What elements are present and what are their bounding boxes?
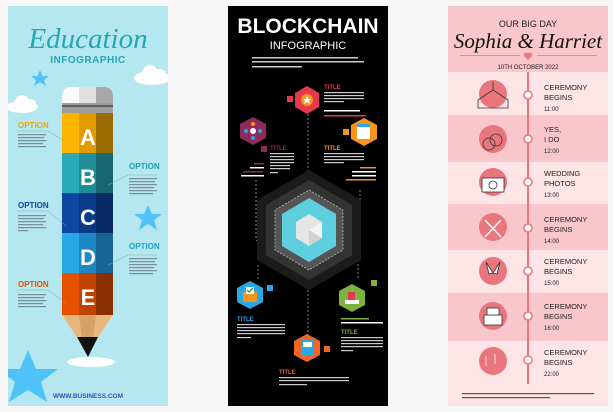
options: OPTION — [18, 121, 49, 130]
timeline entries: CEREMONY — [544, 257, 587, 266]
pencil: E — [81, 285, 95, 310]
timeline entries: BEGINS — [544, 225, 572, 234]
timeline entries: BEGINS — [544, 93, 572, 102]
title block: bottom-right: TITLE — [341, 330, 358, 336]
footer url: WWW.BUSINESS.COM — [53, 393, 123, 400]
timeline entries: 22:00 — [544, 372, 560, 378]
panel: wedding — [448, 6, 608, 406]
timeline entries: BEGINS — [544, 358, 572, 367]
timeline entries: 13:00 — [544, 193, 560, 199]
central hexagon — [257, 170, 361, 290]
title block: left — [241, 146, 294, 176]
options: OPTION — [129, 242, 160, 251]
subtitle: INFOGRAPHIC — [270, 40, 346, 52]
title block: top: TITLE — [324, 85, 341, 91]
icon: network hex — [240, 117, 267, 152]
icon: stars — [0, 70, 162, 402]
timeline entries: CEREMONY — [544, 215, 587, 224]
pencil: D — [80, 245, 96, 270]
title block: bottom — [279, 370, 349, 385]
title block: bottom: TITLE — [279, 370, 296, 376]
timeline entries — [478, 80, 587, 378]
options: OPTION — [18, 201, 49, 210]
icon: document hex — [343, 118, 377, 146]
title: BLOCKCHAIN — [237, 15, 379, 38]
options: OPTION — [18, 280, 49, 289]
title block: bottom-right — [341, 318, 383, 351]
pencil: C — [80, 205, 96, 230]
timeline entries: I DO — [544, 135, 560, 144]
pencil — [62, 87, 115, 367]
header — [448, 6, 608, 72]
timeline entries: CEREMONY — [544, 302, 587, 311]
timeline entries: PHOTOS — [544, 179, 576, 188]
title: Education — [27, 23, 148, 55]
panel: education — [0, 6, 170, 406]
title block: bottom-left — [237, 317, 285, 338]
timeline entries: 12:00 — [544, 149, 560, 155]
timeline rows — [448, 72, 608, 384]
panel: blockchain — [228, 6, 388, 406]
pencil: A — [80, 125, 96, 150]
header: 10TH OCTOBER 2022 — [498, 65, 559, 71]
pencil: B — [80, 165, 96, 190]
subtitle: INFOGRAPHIC — [50, 55, 126, 66]
icon: shield hex — [287, 86, 319, 114]
intro text — [252, 57, 364, 68]
title block: right: TITLE — [324, 146, 341, 152]
icon: cart hex — [339, 280, 377, 312]
timeline entries: 15:00 — [544, 281, 560, 287]
timeline entries: 16:00 — [544, 326, 560, 332]
title block: right — [324, 146, 376, 180]
icon: mail hex — [237, 281, 273, 309]
connector lines — [256, 114, 360, 335]
timeline entries: WEDDING — [544, 169, 580, 178]
timeline entries: 14:00 — [544, 239, 560, 245]
options: OPTION — [129, 162, 160, 171]
header: Sophia & Harriet — [454, 29, 603, 53]
timeline entries: YES, — [544, 125, 561, 134]
icon: clouds — [6, 65, 170, 113]
icon: book hex — [294, 334, 330, 362]
title block: left: TITLE — [270, 146, 287, 152]
timeline entries: BEGINS — [544, 267, 572, 276]
timeline entries: BEGINS — [544, 312, 572, 321]
timeline entries: CEREMONY — [544, 348, 587, 357]
title block: top — [324, 85, 366, 116]
title block: bottom-left: TITLE — [237, 317, 254, 323]
header: OUR BIG DAY — [499, 19, 557, 29]
options — [17, 121, 160, 307]
timeline entries: 11:00 — [544, 107, 559, 113]
timeline entries: CEREMONY — [544, 83, 587, 92]
footer text — [462, 393, 594, 398]
